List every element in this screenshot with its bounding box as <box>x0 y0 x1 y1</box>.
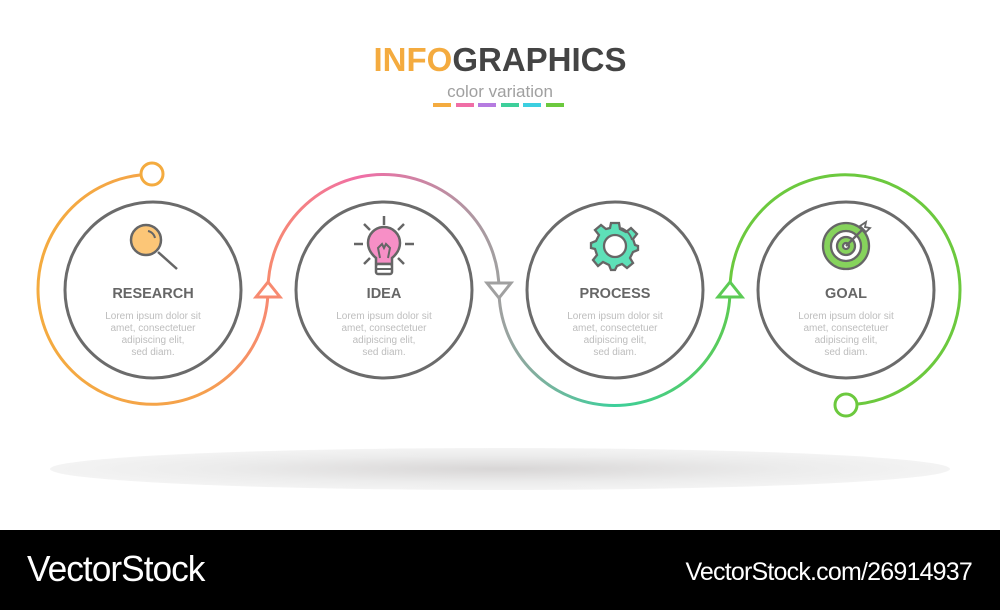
footer id: VectorStock.com/26914937 <box>685 558 972 586</box>
circles <box>65 202 934 378</box>
shadow <box>50 448 950 490</box>
text: idea: sed diam. <box>362 347 406 358</box>
text: process <box>567 286 663 358</box>
text: goal: sed diam. <box>824 347 868 358</box>
text: research: amet, consectetuer <box>110 323 196 334</box>
arc: goal <box>730 175 960 416</box>
text: process: PROCESS <box>580 286 650 302</box>
arc: research <box>38 163 268 404</box>
icon: magnifier <box>131 225 177 269</box>
text: research: Lorem ipsum dolor sit <box>105 311 201 322</box>
arrow 2 <box>487 283 511 298</box>
text: goal: adipiscing elit, <box>815 335 877 346</box>
text: process: sed diam. <box>593 347 637 358</box>
text: idea: IDEA <box>367 286 401 302</box>
text: goal: Lorem ipsum dolor sit <box>798 311 894 322</box>
icon: gear <box>591 223 638 270</box>
text: goal: amet, consectetuer <box>803 323 889 334</box>
arrow 1 <box>256 282 280 297</box>
text: idea: amet, consectetuer <box>341 323 427 334</box>
subtitle: color variation <box>447 82 553 101</box>
text: goal: GOAL <box>825 286 867 302</box>
text: goal <box>798 286 894 358</box>
arc: process <box>499 290 730 406</box>
color dashes <box>433 103 564 107</box>
arc: idea <box>268 174 499 290</box>
text: process: Lorem ipsum dolor sit <box>567 311 663 322</box>
title: INFOGRAPHICS <box>373 41 626 78</box>
text: process: adipiscing elit, <box>584 335 646 346</box>
text: idea: adipiscing elit, <box>353 335 415 346</box>
footer logo: VectorStock <box>27 548 204 589</box>
icon: bulb <box>354 216 414 274</box>
text: research: RESEARCH <box>112 286 194 302</box>
arrow 3 <box>718 282 742 297</box>
text: process: amet, consectetuer <box>572 323 658 334</box>
footer bar <box>0 530 1000 610</box>
text: research: adipiscing elit, <box>122 335 184 346</box>
text: research <box>105 286 201 358</box>
text: idea: Lorem ipsum dolor sit <box>336 311 432 322</box>
text: research: sed diam. <box>131 347 175 358</box>
icon: target <box>823 222 870 269</box>
text: idea <box>336 286 432 358</box>
